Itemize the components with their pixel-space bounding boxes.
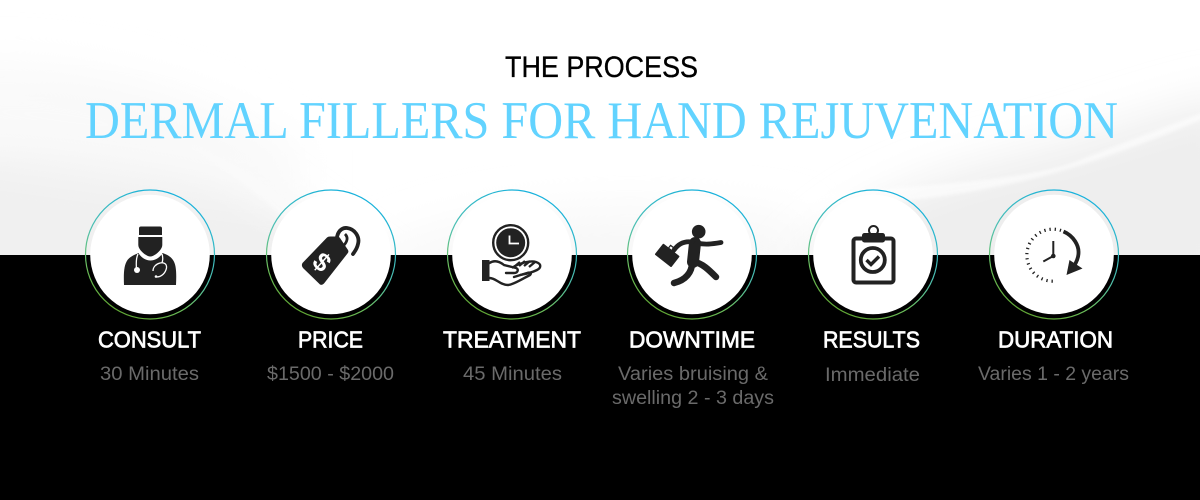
label: duration: DURATION	[998, 326, 1113, 352]
label: results: RESULTS	[823, 326, 920, 352]
panel: duration	[978, 190, 1129, 385]
white disc	[632, 195, 752, 314]
icon: clock with arrow	[1027, 229, 1082, 281]
panel: downtime	[612, 190, 774, 409]
panel: treatment	[443, 190, 581, 385]
icon: price tag	[302, 228, 358, 285]
panel: results	[808, 190, 938, 386]
icon: doctor	[124, 226, 176, 285]
panel: price	[266, 190, 396, 385]
heading: the process: THE PROCESS	[505, 51, 698, 84]
icon: clock over open hand	[482, 225, 540, 285]
white disc	[271, 195, 391, 314]
value: varies 1-2 years: Varies 1 - 2 years	[978, 364, 1129, 385]
label: downtime: DOWNTIME	[629, 326, 755, 352]
title: dermal fillers for hand rejuvenation: DERMAL FILLERS FOR HAND REJUVENATION	[85, 92, 1118, 150]
value: varies bruising and swelling	[612, 364, 774, 409]
white disc	[994, 195, 1114, 314]
black lower band	[0, 255, 1200, 500]
background: white upper area with soft grey waves	[0, 0, 1200, 255]
icon: price tag: $	[307, 246, 338, 278]
label: price: PRICE	[298, 326, 363, 352]
value: 30 minutes: 30 Minutes	[100, 364, 199, 385]
white disc	[452, 195, 572, 314]
white disc	[813, 195, 933, 314]
value: varies bruising and swelling: swelling 2 - 3 days	[612, 388, 774, 409]
value: price range: $1500 - $2000	[267, 364, 394, 385]
panel: consult	[86, 190, 214, 385]
value: immediate: Immediate	[825, 365, 920, 386]
label: treatment: TREATMENT	[443, 326, 581, 352]
ring	[86, 190, 214, 319]
icon: clipboard with check	[854, 226, 894, 282]
white disc	[90, 195, 210, 314]
ring	[448, 190, 576, 319]
ring	[808, 190, 938, 319]
ring	[266, 190, 396, 319]
ring	[990, 190, 1118, 319]
icon: running businessman	[655, 225, 721, 283]
ring	[628, 190, 756, 319]
label: consult: CONSULT	[98, 326, 201, 352]
value: 45 minutes: 45 Minutes	[463, 364, 562, 385]
value: varies bruising and swelling: Varies bruising &	[618, 364, 768, 385]
